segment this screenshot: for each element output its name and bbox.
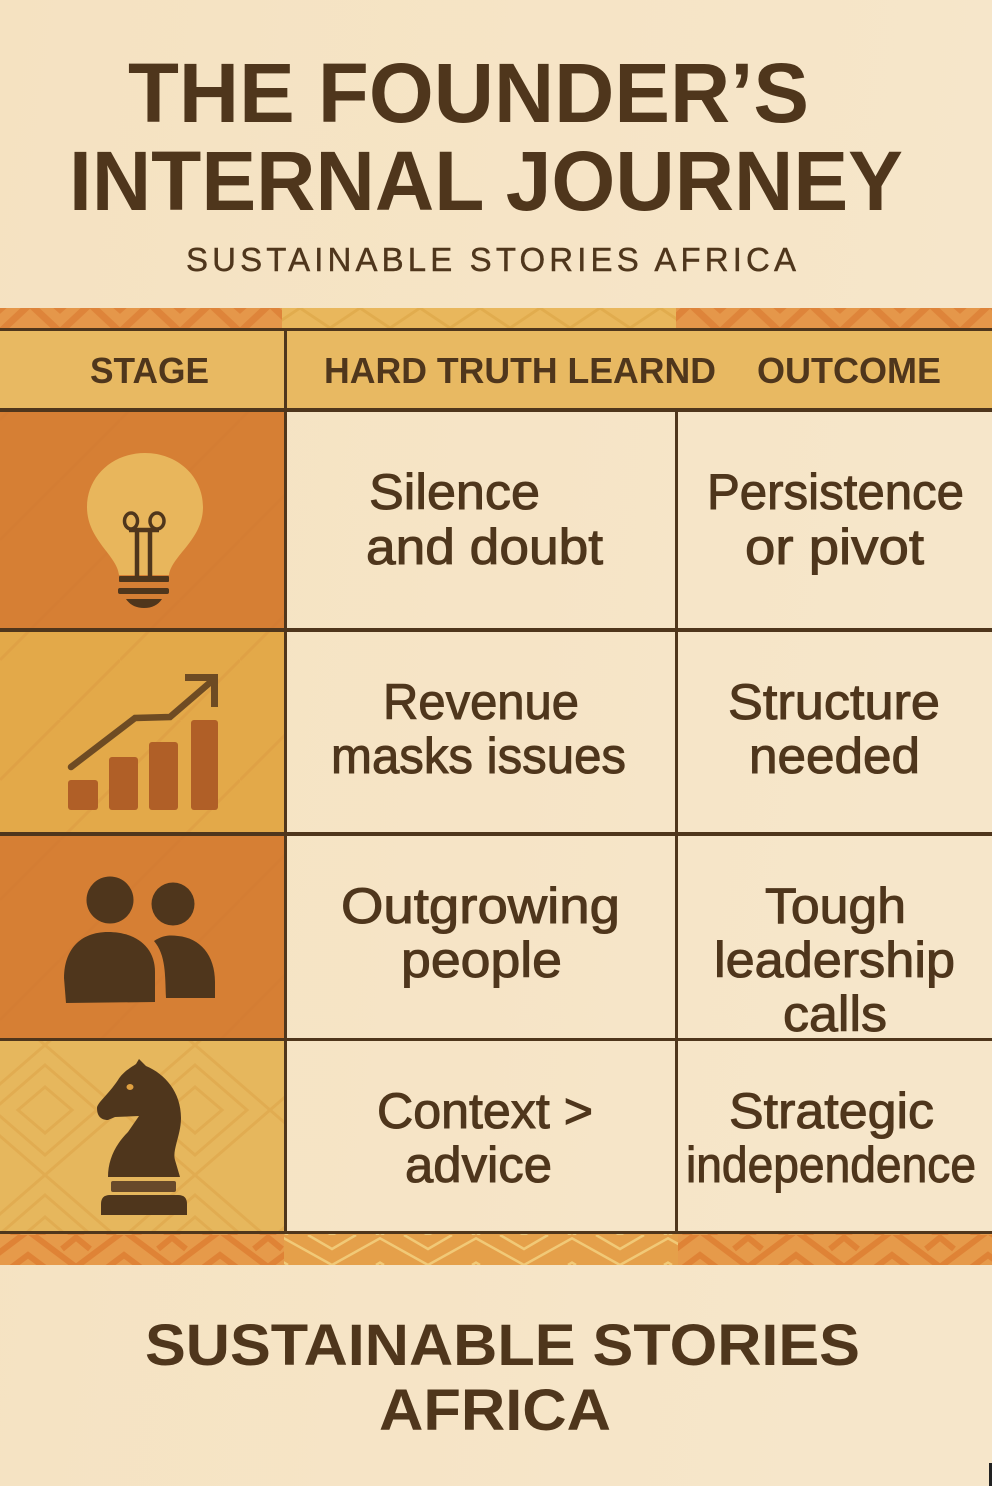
- row 1: hard truth: [366, 464, 603, 575]
- table: [0, 328, 992, 1234]
- icon: light bulb: [87, 453, 203, 608]
- footer brand name: AFRICA: [379, 1378, 611, 1443]
- icon: chess knight: [97, 1059, 187, 1215]
- row 4: hard truth: Context >: [377, 1083, 593, 1139]
- title: THE FOUNDER’S: [128, 46, 809, 140]
- row 1: outcome: or pivot: [745, 519, 924, 575]
- column heading: stage: STAGE: [90, 350, 209, 391]
- row 4: hard truth: advice: [405, 1137, 552, 1193]
- table grid lines: [0, 328, 992, 1234]
- row 3: outcome: [714, 878, 955, 1042]
- row 2: outcome: Structure: [728, 674, 940, 730]
- top patterned band: [0, 308, 992, 328]
- footer brand name: [145, 1313, 860, 1443]
- row 4: outcome: Strategic: [729, 1083, 934, 1139]
- title: INTERNAL JOURNEY: [69, 134, 903, 228]
- stage cell backgrounds: [0, 412, 284, 1232]
- row 1: hard truth: Silence: [369, 464, 540, 520]
- row 3: hard truth: Outgrowing: [341, 878, 620, 934]
- row 2: hard truth: masks issues: [331, 728, 626, 784]
- footer brand name: SUSTAINABLE STORIES: [145, 1313, 860, 1378]
- row 2: hard truth: [331, 674, 626, 784]
- row 3: outcome: calls: [783, 986, 887, 1042]
- icon: two people: [64, 876, 215, 1003]
- row 1: outcome: [707, 464, 964, 575]
- subtitle: SUSTAINABLE STORIES AFRICA: [186, 241, 796, 278]
- row 3: hard truth: [341, 878, 620, 988]
- column heading: outcome: OUTCOME: [757, 350, 941, 391]
- row 2: outcome: needed: [749, 728, 920, 784]
- row 4: hard truth: [377, 1083, 593, 1193]
- row 4: outcome: independence: [686, 1137, 976, 1193]
- row 4: outcome: [686, 1083, 976, 1193]
- row 2: outcome: [728, 674, 940, 784]
- column heading: hard truth learned: HARD TRUTH LEARND: [324, 350, 716, 391]
- row 3: outcome: Tough: [765, 878, 906, 934]
- row 1: outcome: Persistence: [707, 464, 964, 520]
- row 1: hard truth: and doubt: [366, 519, 603, 575]
- row 3: outcome: leadership: [714, 932, 955, 988]
- row 3: hard truth: people: [401, 932, 562, 988]
- row 2: hard truth: Revenue: [383, 674, 579, 730]
- icon: rising bar chart with arrow: [68, 674, 218, 810]
- bottom patterned band: [0, 1234, 992, 1265]
- table header row: [0, 331, 992, 409]
- title: [69, 46, 903, 228]
